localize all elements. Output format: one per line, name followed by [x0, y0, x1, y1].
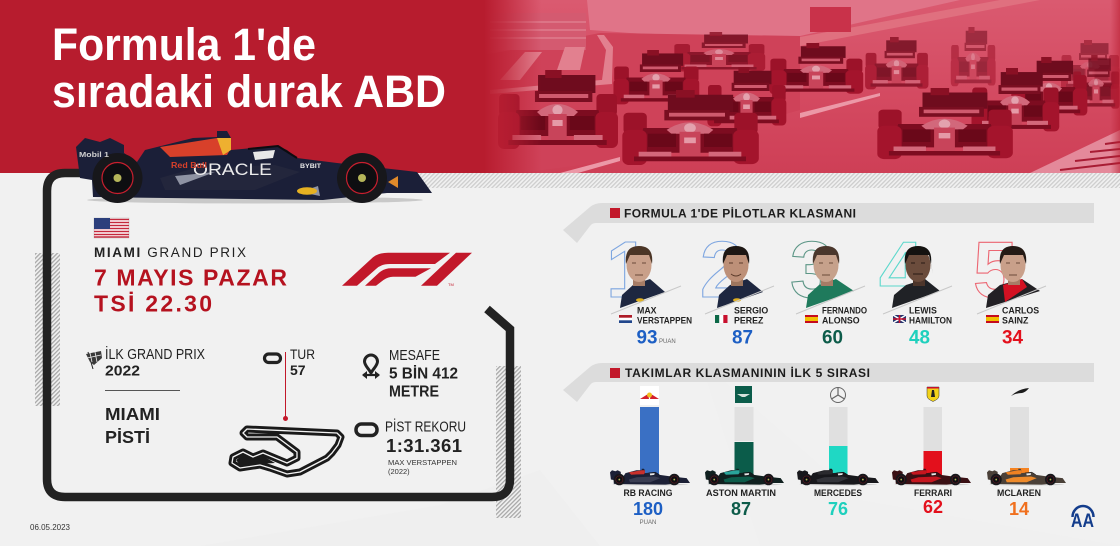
team: Ferrari — [892, 387, 971, 517]
car: Red Bull RB19 — [76, 131, 432, 204]
distance — [389, 348, 458, 400]
driver: Lewis Hamilton: LEWIS — [909, 306, 937, 316]
team: RB Racing: RB RACING — [624, 488, 672, 499]
icon: checkered flag — [86, 351, 102, 369]
car: Red Bull RB19: BYBIT — [300, 163, 321, 170]
lap count: 57 — [290, 362, 306, 378]
first grand prix — [105, 345, 205, 380]
circuit name: PİSTİ — [105, 427, 150, 447]
team: RB Racing — [610, 386, 690, 526]
driver: Max Verstappen: 93 — [636, 328, 658, 349]
section heading: FORMULA 1'DE PİLOTLAR KLASMANI — [624, 206, 856, 220]
driver: Carlos Sainz: CARLOS — [1002, 306, 1039, 316]
track record: 1:31.361 — [386, 435, 462, 456]
team: RB Racing: PUAN — [640, 520, 656, 526]
circuit name: MIAMI — [105, 404, 160, 424]
section heading — [563, 363, 1094, 402]
driver: Max Verstappen: 1 — [606, 225, 650, 314]
lap count: TUR — [290, 346, 315, 362]
car: Red Bull RB19: ORACLE — [193, 160, 272, 179]
driver: Max Verstappen — [606, 225, 692, 349]
team: McLaren: MCLAREN — [997, 488, 1041, 499]
panel frame — [47, 173, 510, 497]
team: Aston Martin: ASTON MARTIN — [706, 488, 776, 499]
panel: constructor standings — [563, 363, 1094, 526]
driver: Fernando Alonso: FERNANDO — [822, 306, 867, 316]
driver: Sergio Perez: 87 — [732, 328, 753, 349]
driver: Fernando Alonso: 60 — [822, 328, 843, 349]
team: McLaren: 14 — [1009, 499, 1029, 519]
first grand prix: 2022 — [105, 362, 140, 380]
circuit name — [105, 390, 180, 447]
driver: Lewis Hamilton: 48 — [909, 328, 930, 349]
track record: MAX VERSTAPPEN — [388, 458, 457, 467]
lap count — [290, 346, 315, 378]
driver: Sergio Perez: SERGIO — [734, 306, 768, 316]
team: RB Racing: 180 — [633, 499, 663, 519]
team: Mercedes: MERCEDES — [814, 488, 862, 499]
driver: Carlos Sainz: SAINZ — [1002, 316, 1029, 326]
header photo: race start — [484, 0, 1120, 173]
race date and time: 7 MAYIS PAZAR — [94, 264, 287, 290]
icon: distance pin — [362, 355, 380, 379]
hatched accents beside race panel — [35, 253, 521, 518]
track record: PİST REKORU — [385, 418, 466, 436]
race date and time: TSİ 22.30 — [94, 290, 212, 316]
race name: MIAMI GRAND PRIX — [94, 245, 246, 260]
distance: METRE — [389, 384, 439, 400]
driver: Lewis Hamilton: 4 — [879, 225, 924, 314]
driver: Carlos Sainz: 34 — [1002, 328, 1023, 349]
team: McLaren — [987, 388, 1066, 519]
car: Red Bull RB19: Red Bull — [171, 161, 207, 170]
driver: Carlos Sainz: 5 — [973, 225, 1018, 314]
icon: track record — [356, 424, 377, 436]
section heading — [563, 203, 1094, 243]
icon: AA logo: AA — [1071, 511, 1094, 532]
team: Mercedes — [797, 388, 879, 519]
title: sıradaki durak ABD — [52, 66, 446, 117]
team: Aston Martin: 87 — [731, 499, 751, 519]
distance: MESAFE — [389, 348, 440, 364]
driver: Lewis Hamilton — [879, 225, 952, 349]
driver: Fernando Alonso — [790, 225, 867, 349]
driver: Sergio Perez: 2 — [700, 225, 744, 314]
race date and time — [94, 264, 287, 316]
track record — [385, 418, 466, 476]
team: Aston Martin — [705, 386, 784, 519]
driver: Fernando Alonso: ALONSO — [822, 316, 860, 326]
driver: Max Verstappen: MAX — [637, 306, 657, 316]
team: Mercedes: 76 — [828, 499, 848, 519]
circuit map — [232, 429, 341, 474]
header band — [0, 0, 1120, 173]
distance: 5 BİN 412 — [389, 366, 458, 382]
track pointer — [283, 352, 288, 421]
team: Ferrari: 62 — [923, 497, 943, 517]
icon: F1 logo: TM — [448, 282, 454, 287]
section heading: TAKIMLAR KLASMANININ İLK 5 SIRASI — [625, 365, 870, 380]
driver: Max Verstappen: VERSTAPPEN — [637, 316, 692, 326]
track record: (2022) — [388, 467, 410, 476]
team: Ferrari: FERRARI — [914, 488, 952, 499]
driver: Lewis Hamilton: HAMILTON — [909, 316, 952, 326]
date: 06.05.2023 — [30, 522, 70, 532]
panel: driver standings — [563, 203, 1094, 349]
title — [52, 19, 446, 117]
driver: Sergio Perez — [700, 225, 774, 349]
driver: Max Verstappen: PUAN — [659, 339, 676, 345]
driver: Fernando Alonso: 3 — [790, 225, 834, 314]
icon: USA flag — [94, 218, 129, 238]
title: Formula 1'de — [52, 19, 316, 70]
panel: Miami Grand Prix race details — [47, 173, 510, 497]
driver: Sergio Perez: PEREZ — [734, 316, 764, 326]
first grand prix: İLK GRAND PRIX — [105, 345, 205, 363]
hatched strip under header — [420, 173, 1120, 188]
driver: Carlos Sainz — [973, 225, 1046, 349]
icon: lap — [264, 354, 280, 362]
car: Red Bull RB19: Mobil 1 — [79, 152, 109, 159]
icon: F1 logo — [342, 253, 472, 287]
